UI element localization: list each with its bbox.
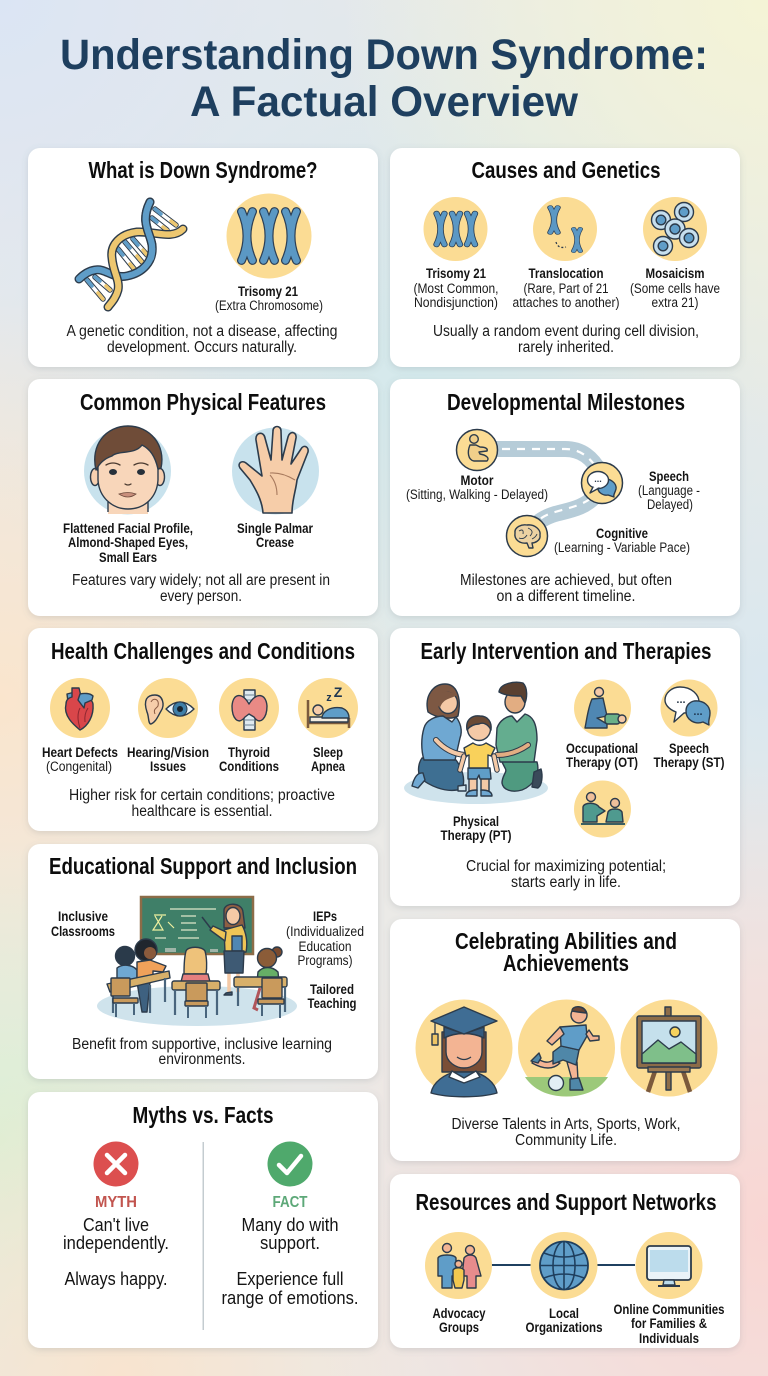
icon: DNA helix — [79, 202, 183, 307]
panel: Celebrating Abilities and Achievements — [390, 919, 740, 1161]
label: Advocacy Groups — [432, 1306, 486, 1335]
label: Motor — [406, 473, 548, 502]
body text: starts early in life. — [511, 874, 621, 891]
label: IEPs: IEPs — [313, 909, 337, 924]
label: myth: MYTH — [95, 1194, 137, 1211]
heading: What is Down Syndrome? — [88, 157, 318, 183]
heading: Early Intervention and Therapies — [420, 638, 712, 664]
label: Trisomy 21: Nondisjunction) — [414, 295, 498, 310]
label: Physical Therapy: Physical — [453, 814, 499, 829]
fact statements: support. — [260, 1233, 320, 1253]
label: Speech Therapy: Speech — [669, 741, 709, 756]
icon: hand — [232, 426, 319, 514]
label: Online Communities: Individuals — [639, 1331, 699, 1346]
label: Inclusive Classrooms: Inclusive — [58, 909, 108, 924]
icon: speech milestone — [582, 462, 622, 504]
label: Speech: Delayed) — [647, 497, 693, 512]
icon: advocacy family — [425, 1232, 492, 1299]
body text: Milestones are achieved, but often — [460, 572, 672, 589]
label: Occupational Therapy: Occupational — [566, 741, 638, 756]
label: Hearing/Vision Issues: Issues — [150, 759, 186, 774]
label: Thyroid Conditions: Thyroid — [228, 745, 270, 760]
heading: Educational Support and Inclusion — [49, 853, 357, 879]
icon: cognitive milestone — [506, 516, 548, 556]
icon: sleep: Z — [334, 684, 343, 700]
body text: Usually a random event during cell division, — [433, 323, 699, 340]
panel: Early Intervention and Therapies — [390, 628, 740, 906]
icon: face — [84, 426, 171, 514]
icon: speech therapy: ... — [693, 706, 703, 718]
icon: speech therapy: ... — [676, 694, 686, 706]
label: Motor: Motor — [460, 473, 494, 488]
label: Sleep Apnea — [311, 745, 345, 774]
panel: What is Down Syndrome? — [28, 148, 378, 367]
icon: trisomy — [424, 197, 488, 261]
body text: healthcare is essential. — [132, 803, 272, 820]
label: Mosaicism — [630, 266, 720, 310]
myth statements: independently. — [63, 1233, 169, 1253]
label: Advocacy Groups: Groups — [439, 1320, 479, 1335]
label: facial features: Almond-Shaped Eyes, — [68, 535, 188, 550]
body text: Higher risk for certain conditions; proactive — [69, 787, 335, 804]
fact statements: Many do with — [242, 1215, 338, 1235]
panel: Health Challenges and Conditions — [28, 628, 378, 831]
body text: every person. — [160, 588, 242, 605]
panel: Developmental Milestones — [390, 379, 740, 616]
body text: development. Occurs naturally. — [107, 339, 297, 356]
body text: A genetic condition, not a disease, affecting — [66, 323, 338, 340]
icon: ear and eye — [138, 678, 198, 738]
label: Thyroid Conditions: Conditions — [219, 759, 279, 774]
label: Speech Therapy: Therapy (ST) — [654, 755, 724, 770]
fact statements: Experience full — [236, 1269, 344, 1289]
icon: fact check — [268, 1142, 312, 1186]
myth statements — [63, 1215, 169, 1289]
label: Inclusive Classrooms — [51, 909, 115, 939]
icon: occupational therapy — [574, 680, 631, 736]
icon: graduate — [416, 1000, 512, 1097]
icon: thyroid — [219, 678, 279, 738]
label: Local Organizations: Organizations — [526, 1320, 602, 1335]
label: Occupational Therapy — [566, 741, 638, 770]
label: Translocation: attaches to another) — [512, 295, 620, 310]
body text — [66, 323, 338, 356]
body text — [452, 1116, 680, 1149]
label: Mosaicism: (Some cells have — [630, 281, 720, 296]
label: Translocation — [512, 266, 620, 310]
label: Speech: (Language - — [638, 483, 700, 498]
label: Occupational Therapy: Therapy (OT) — [566, 755, 638, 770]
label: Translocation: (Rare, Part of 21 — [524, 281, 608, 296]
label: Local Organizations: Local — [549, 1306, 579, 1321]
label: Trisomy 21 — [414, 266, 498, 310]
heading: Common Physical Features — [80, 389, 326, 415]
icon: speech milestone: ... — [594, 474, 602, 484]
label: Hearing/Vision Issues: Hearing/Vision — [127, 745, 209, 760]
label: Tailored Teaching: Teaching — [308, 996, 356, 1011]
myth statements: Can't live — [83, 1215, 149, 1235]
label: Online Communities: for Families & — [631, 1316, 707, 1331]
icon: translocation — [533, 197, 597, 261]
heading — [455, 928, 677, 976]
heading: Health Challenges and Conditions — [51, 638, 355, 664]
illustration: classroom — [97, 897, 297, 1026]
body text: Crucial for maximizing potential; — [466, 858, 666, 875]
body text: Benefit from supportive, inclusive learning — [72, 1036, 332, 1053]
label: Cognitive — [554, 526, 690, 555]
label: Motor: (Sitting, Walking - Delayed) — [406, 487, 548, 502]
label: Sleep Apnea: Sleep — [313, 745, 343, 760]
label: IEPs — [286, 909, 364, 968]
label: IEPs: (Individualized — [286, 924, 364, 939]
body text — [433, 323, 699, 356]
body text — [460, 572, 672, 605]
icon: physical therapy session — [574, 780, 631, 838]
icon: motor milestone — [456, 430, 498, 470]
body text — [69, 787, 335, 820]
label: Heart Defects: Heart Defects — [42, 745, 118, 760]
label: facial features: Flattened Facial Profile, — [63, 521, 193, 536]
label: Hearing/Vision Issues — [127, 745, 209, 774]
icon: globe — [530, 1232, 598, 1299]
road path — [490, 449, 600, 530]
label: Cognitive: Cognitive — [596, 526, 648, 541]
label: Trisomy 21: Trisomy 21 — [426, 266, 486, 281]
label: palmar crease: Single Palmar — [237, 521, 314, 536]
label: Speech — [638, 469, 700, 512]
label: Mosaicism: extra 21) — [652, 295, 698, 310]
label: palmar crease — [237, 521, 314, 550]
label: Heart Defects: (Congenital) — [46, 759, 112, 774]
title: A Factual Overview — [190, 78, 579, 126]
icon: mosaicism cells — [643, 197, 707, 261]
label: Physical Therapy — [440, 814, 512, 843]
body text: on a different timeline. — [496, 588, 636, 605]
body text — [72, 572, 330, 605]
label: fact: FACT — [272, 1194, 308, 1211]
label: Trisomy 21: (Most Common, — [414, 281, 498, 296]
label: Translocation: Translocation — [528, 266, 604, 281]
heading: Myths vs. Facts — [132, 1102, 274, 1128]
label: Speech Therapy — [654, 741, 724, 770]
label: Cognitive: (Learning - Variable Pace) — [554, 540, 690, 555]
label: facial features: Small Ears — [99, 550, 157, 565]
body text: Diverse Talents in Arts, Sports, Work, — [452, 1116, 680, 1133]
label: Physical Therapy: Therapy (PT) — [440, 828, 512, 843]
fact statements: range of emotions. — [222, 1288, 358, 1308]
heading: Celebrating Abilities and — [455, 928, 677, 954]
body text — [72, 1036, 332, 1068]
label: Online Communities — [614, 1302, 724, 1346]
label: Trisomy 21: (Extra Chromosome) — [215, 298, 323, 313]
panel: Resources and Support Networks — [390, 1174, 740, 1348]
heading: Causes and Genetics — [472, 157, 660, 183]
heading: Achievements — [503, 950, 629, 976]
icon: trisomy 21 chromosomes — [226, 194, 312, 278]
label: Trisomy 21: Trisomy 21 — [238, 284, 298, 299]
label: Inclusive Classrooms: Classrooms — [51, 924, 115, 939]
body text: Community Life. — [515, 1132, 617, 1149]
label: Heart Defects — [42, 745, 118, 774]
panel: Causes and Genetics — [390, 148, 740, 367]
label: Tailored Teaching — [308, 982, 356, 1011]
body text — [466, 858, 666, 891]
label: Thyroid Conditions — [219, 745, 279, 774]
label: Trisomy 21 — [215, 284, 323, 313]
icon: soccer player — [518, 1000, 615, 1096]
icon: myth cross — [94, 1142, 138, 1186]
icon: speech therapy — [660, 680, 718, 736]
heading: Developmental Milestones — [447, 389, 685, 415]
label: IEPs: Education — [298, 939, 352, 954]
body text: rarely inherited. — [518, 339, 614, 356]
label: Advocacy Groups: Advocacy — [432, 1306, 486, 1321]
label: Sleep Apnea: Apnea — [311, 759, 345, 774]
panel: Educational Support and Inclusion — [28, 844, 378, 1079]
label: Online Communities: Online Communities — [614, 1302, 724, 1317]
panel: Myths vs. Facts — [28, 1092, 378, 1348]
label: Local Organizations — [526, 1306, 602, 1335]
body text: environments. — [158, 1051, 246, 1068]
fact statements — [222, 1215, 358, 1308]
label: palmar crease: Crease — [256, 535, 294, 550]
icon: monitor — [636, 1232, 702, 1299]
icon: sleep — [298, 678, 358, 738]
label: facial features — [63, 521, 193, 565]
label: IEPs: Programs) — [298, 953, 352, 968]
icon: sleep: z — [326, 692, 332, 704]
icon: heart — [50, 678, 110, 738]
title — [60, 31, 708, 126]
label: Mosaicism: Mosaicism — [646, 266, 704, 281]
illustration: family physical therapy — [404, 682, 548, 804]
myth statements: Always happy. — [64, 1269, 168, 1289]
label: Speech: Speech — [649, 469, 689, 484]
panel: Common Physical Features — [28, 379, 378, 616]
label: Tailored Teaching: Tailored — [310, 982, 354, 997]
body text: Features vary widely; not all are present in — [72, 572, 330, 589]
title: Understanding Down Syndrome: — [60, 31, 708, 79]
icon: painting easel — [620, 1000, 718, 1096]
